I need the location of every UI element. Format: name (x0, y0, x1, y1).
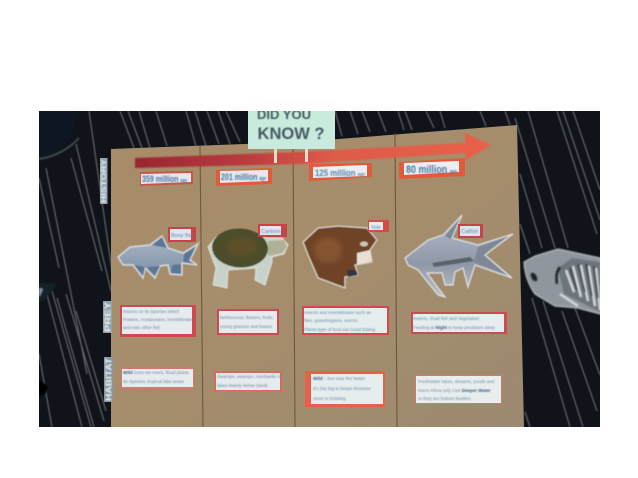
date label: 201 million: 201 million ago (221, 172, 266, 183)
illustration: blue fish (118, 236, 198, 278)
prey text: column 3 (302, 306, 389, 335)
habitat text: column 3 (305, 371, 385, 407)
name tag: turtle (258, 224, 287, 237)
habitat text: column 4: or they are bottom feeders (418, 396, 472, 401)
habitat text: column 1: Wild Zone we rivers, flood plains (123, 370, 188, 375)
timeline arrow (135, 133, 491, 168)
date label: 359 million (140, 171, 193, 186)
habitat text: column 2: Swamps, swamps, riverbanks or (217, 374, 282, 379)
date label: 125 million: 125 million ago (315, 168, 365, 179)
habitat text: column 3: close to Existing (313, 396, 346, 401)
name tag: catfish (458, 224, 483, 238)
prey text: column 2: herbivorous: flowers, fruits, (220, 315, 274, 320)
name tag: mammal (368, 220, 389, 232)
habitat text: column 1 (121, 367, 194, 389)
habitat text: column 1: Its Species, tropical lake areas (123, 379, 185, 384)
habitat text: column 3: It's Dry big to keeps Moisture (313, 386, 371, 391)
name tag: turtle: Cartoon (261, 229, 281, 235)
date label: 359 million: 359 million ago (142, 174, 187, 185)
sign: did you know: KNOW ? (258, 125, 324, 143)
habitat text: column 4: Freshwater lakes, streams, ponds and (418, 379, 495, 384)
prey text: column 3: Plants type of food eat Good Eating (304, 327, 376, 332)
prey text: column 2: young grasses and leaves (220, 324, 273, 329)
side label: habitat: HABITAT (104, 358, 114, 401)
prey text: column 2 (217, 309, 279, 335)
shoe (524, 249, 600, 314)
name tag: mammal: Vole (371, 225, 381, 231)
illustration: turtle (208, 227, 288, 288)
prey text: column 1: Prawns, crustaceans, invertebrates (123, 317, 194, 322)
sign: did you know: DID YOU (257, 107, 311, 122)
date label: 80 million: 80 million ago (406, 164, 457, 176)
prey text: column 3: flies, grasshoppers, worms. (304, 318, 359, 323)
name tag: catfish: Catfish (461, 229, 478, 235)
habitat text: column 2: lakes Mainly below Sandi (217, 383, 268, 388)
prey text: column 1: Insects on its Species which (123, 309, 180, 314)
prey text: column 1 (120, 305, 196, 337)
prey text: column 4: Insects, Snail fish and Vegetation (413, 316, 480, 321)
name tag: fish (168, 227, 196, 242)
carpet background (39, 107, 600, 427)
side label: history: HISTORY (99, 159, 108, 203)
habitat text: column 3: Wild – live near the Water (313, 376, 365, 381)
illustration: brown beaver-like mammal (303, 226, 377, 288)
name tag: fish: Bony fish (171, 233, 194, 239)
sign: did you know (248, 107, 335, 149)
prey text: column 4: Feeding at Night to keep predators away (413, 325, 495, 330)
habitat text: column 4: rivers Africa only Live Deeper Water (418, 388, 491, 393)
cardboard board (111, 125, 524, 427)
infographic photo of timeline board (39, 111, 600, 427)
date label: 80 million (399, 158, 465, 179)
side label: prey: PREY (102, 302, 112, 332)
dark object top-left (39, 111, 79, 396)
panel fold lines (200, 133, 397, 427)
prey text: column 4 (411, 312, 507, 334)
date label: 201 million (216, 168, 272, 186)
illustration: catfish (405, 215, 513, 297)
date label: 125 million (309, 163, 372, 181)
habitat text: column 4 (415, 375, 502, 404)
prey text: column 1: and eats other fish (123, 325, 161, 330)
prey text: column 3: Insects and invertebrates such as (304, 310, 372, 315)
sign posts (274, 148, 308, 163)
habitat text: column 2 (214, 371, 282, 391)
